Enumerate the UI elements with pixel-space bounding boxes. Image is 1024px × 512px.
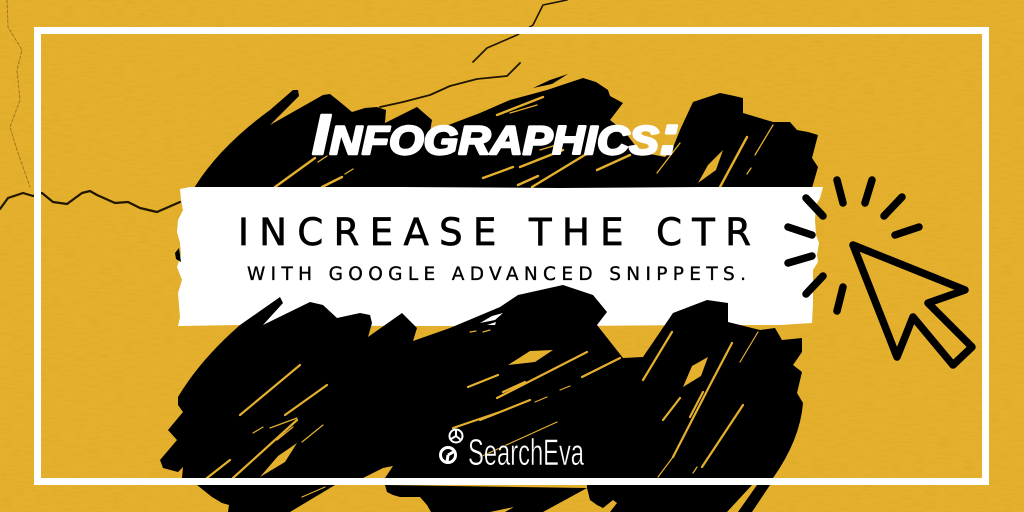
white frame bottom edge over brush (34, 478, 989, 485)
black brush stroke: below frame (197, 485, 770, 512)
yellow gaps in lower brush stroke (207, 330, 758, 497)
subheading: WITH GOOGLE ADVANCED SNIPPETS. (247, 264, 746, 285)
logo wordmark: SearchEva (468, 432, 584, 473)
yellow wedge above frame (363, 466, 514, 512)
yellow feather in upper brush stroke (698, 150, 723, 183)
title: Infographics: Infographics: (312, 103, 680, 167)
thin sliver above upper brush stroke (533, 74, 568, 88)
logo icon: SearchEva leaves (440, 430, 462, 462)
icon: click rays (788, 180, 919, 311)
white paint flecks (480, 313, 503, 325)
torn white title strip (177, 187, 823, 326)
heading: increase the CTR: INCREASE THE CTR (238, 211, 751, 254)
icon: cursor arrow (853, 245, 972, 365)
black brush stroke: lower (160, 285, 803, 478)
torn strip left fragment (175, 248, 181, 262)
yellow gaps in upper brush stroke (275, 97, 773, 187)
yellow feathers in lower brush stroke (260, 350, 708, 477)
black brush stroke: upper (190, 78, 818, 195)
wall cracks (0, 0, 567, 212)
